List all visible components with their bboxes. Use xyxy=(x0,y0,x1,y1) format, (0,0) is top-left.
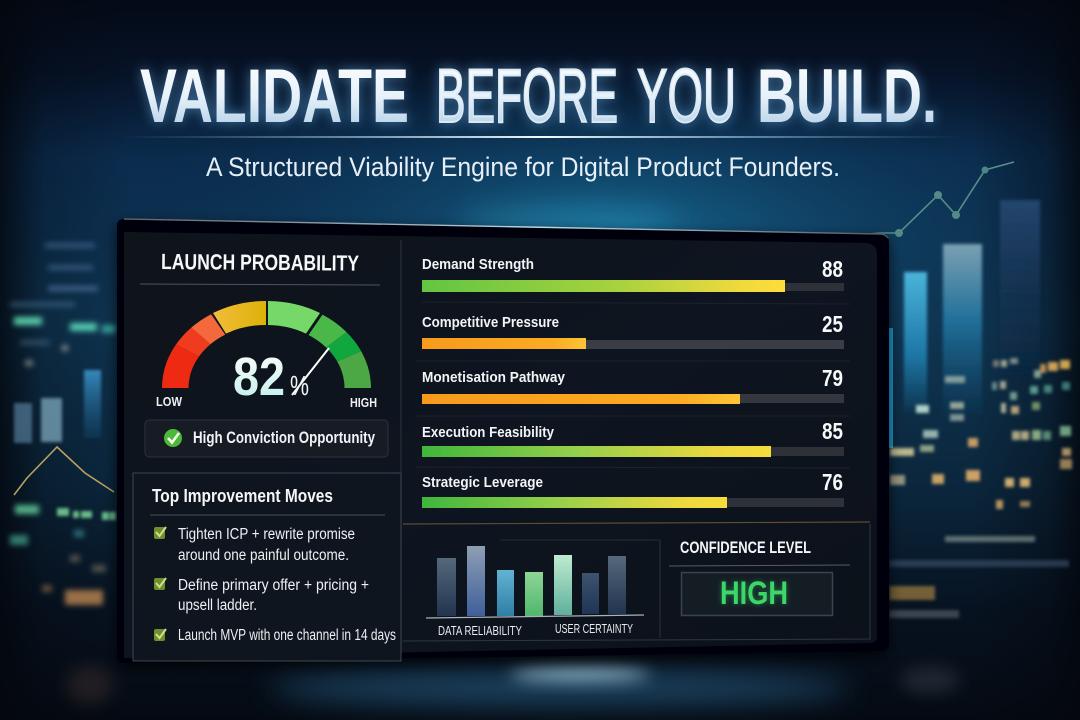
bar: demand strength: 88 xyxy=(822,256,843,282)
heading: top improvement moves: Top Improvement Moves xyxy=(152,486,333,506)
bar: competitive pressure xyxy=(422,311,844,349)
bar: strategic leverage xyxy=(422,469,844,508)
subtitle: A Structured Viability Engine for Digital Product Founders. xyxy=(206,152,840,182)
panel: dashboard xyxy=(117,219,889,663)
bar: monetisation pathway xyxy=(422,365,844,404)
confidence badge: HIGH xyxy=(720,575,788,611)
bar: competitive pressure: Competitive Pressure xyxy=(422,314,559,331)
bar: strategic leverage: 76 xyxy=(822,469,843,495)
gauge value: 82 xyxy=(233,347,285,407)
move two: upsell ladder. xyxy=(178,597,257,614)
heading: confidence level: CONFIDENCE LEVEL xyxy=(680,538,811,557)
bar: strategic leverage: Strategic Leverage xyxy=(422,474,543,491)
title rule xyxy=(122,136,962,138)
panel: launch probability xyxy=(140,249,388,457)
move one xyxy=(154,526,355,564)
title: VALIDATE xyxy=(140,54,409,139)
chart label: data reliability: DATA RELIABILITY xyxy=(438,623,522,638)
background: left city lights and chart xyxy=(10,243,116,605)
panel: confidence level xyxy=(669,538,850,616)
title xyxy=(140,54,937,139)
gauge xyxy=(156,301,377,410)
background: right bars and chart xyxy=(845,162,1072,618)
move two: Define primary offer + pricing + xyxy=(178,577,369,594)
confidence badge xyxy=(682,572,832,616)
bar: execution feasibility: Execution Feasibility xyxy=(422,424,555,441)
bar: demand strength xyxy=(422,256,844,292)
gauge needle xyxy=(292,348,329,395)
bar: monetisation pathway: Monetisation Pathway xyxy=(422,369,566,386)
bar: demand strength: Demand Strength xyxy=(422,256,534,273)
bar: execution feasibility: 85 xyxy=(822,418,843,444)
title: YOU xyxy=(637,54,736,139)
bar: execution feasibility xyxy=(422,418,844,457)
title: BEFORE xyxy=(436,54,618,139)
gauge high label: HIGH xyxy=(350,395,377,410)
move two xyxy=(154,577,369,614)
chart label: user certainty: USER CERTAINTY xyxy=(555,621,633,636)
move three: Launch MVP with one channel in 14 days xyxy=(178,627,396,644)
status pill xyxy=(145,420,388,457)
bar chart xyxy=(426,546,644,618)
background: floor reflection xyxy=(66,665,960,706)
status text: High Conviction Opportunity xyxy=(193,429,376,447)
gauge low label: LOW xyxy=(156,394,183,409)
move one: around one painful outcome. xyxy=(178,547,349,564)
panel: score bars xyxy=(401,240,850,508)
panel: reliability chart xyxy=(403,522,870,641)
icon: green check xyxy=(164,429,182,447)
bar: monetisation pathway: 79 xyxy=(822,365,843,391)
panel: top improvement moves xyxy=(133,473,401,661)
heading: launch probability: LAUNCH PROBABILITY xyxy=(161,249,359,276)
title: BUILD. xyxy=(757,54,937,139)
gauge percent: % xyxy=(290,370,309,401)
bar: competitive pressure: 25 xyxy=(822,311,843,337)
move one: Tighten ICP + rewrite promise xyxy=(178,526,355,543)
